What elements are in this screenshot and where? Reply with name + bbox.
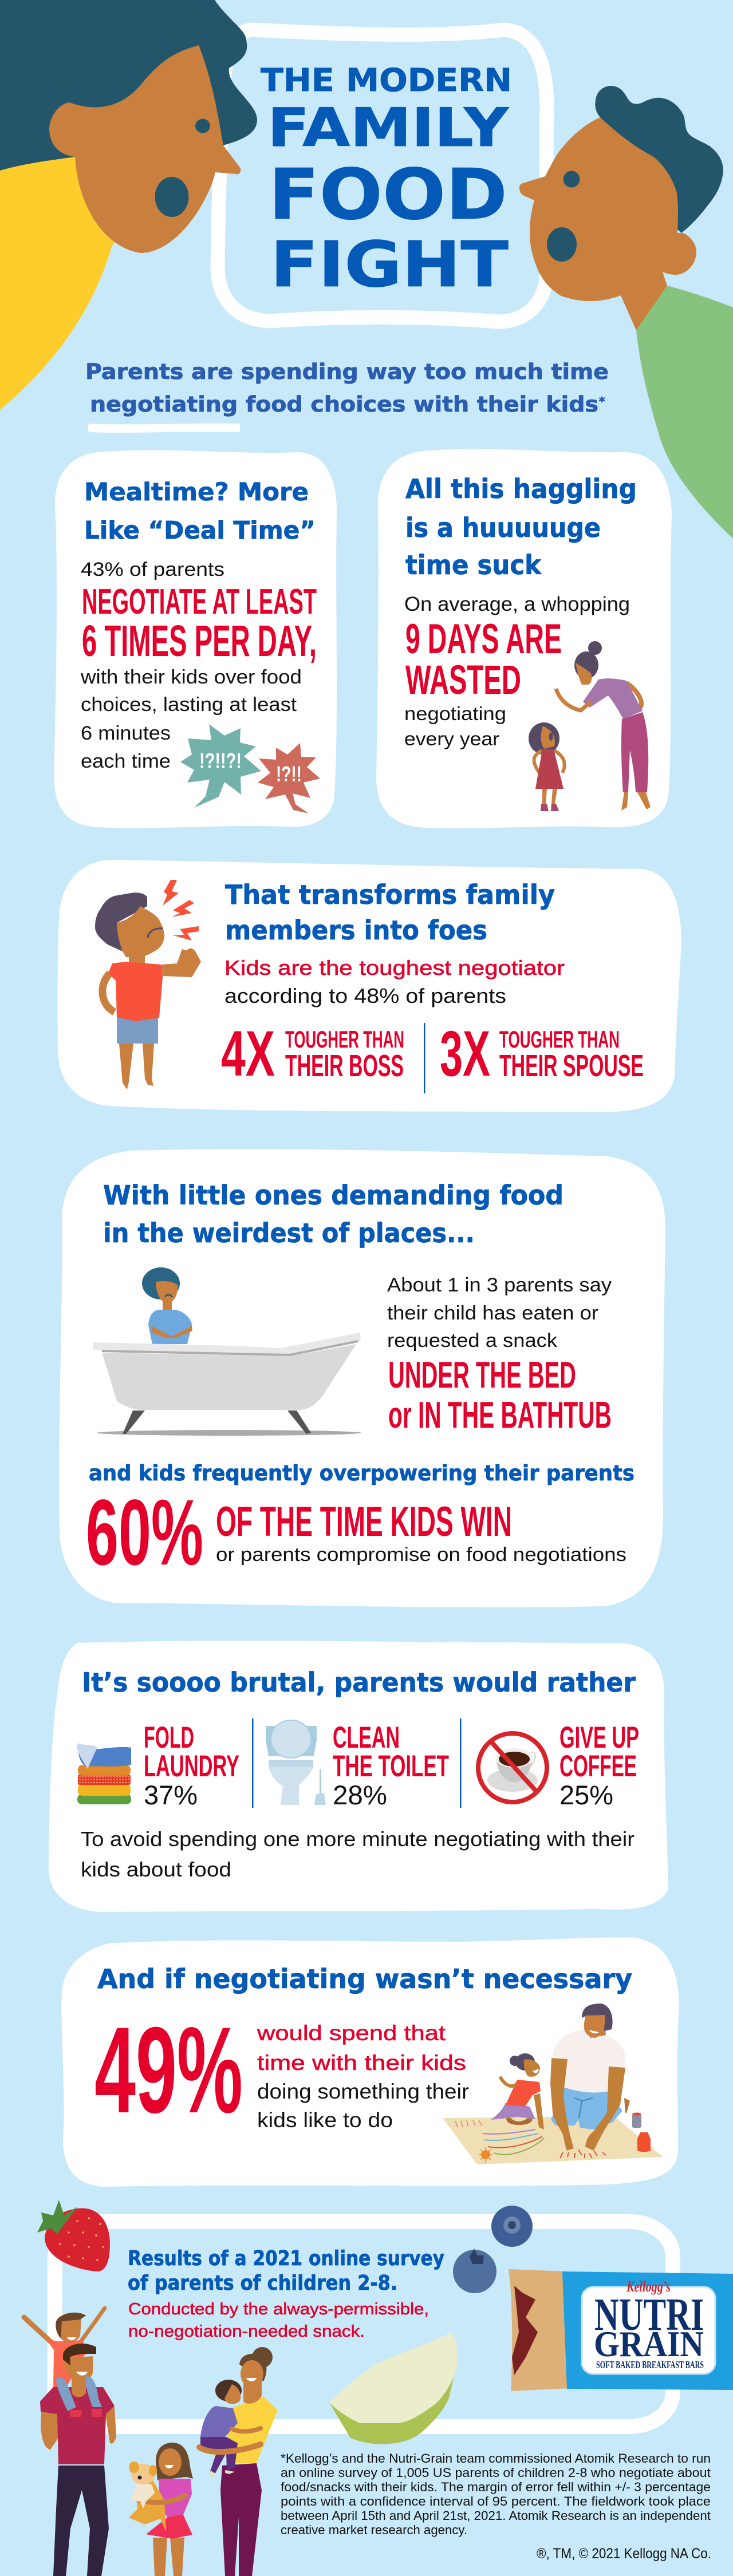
footnote xyxy=(281,2451,711,2537)
stat: under the bed or in the bathtub: UNDER THE BED xyxy=(388,1354,576,1396)
stat: 4X tougher than boss: TOUGHER THAN xyxy=(285,1026,404,1053)
subtitle: negotiating food choices with their kids xyxy=(90,392,598,417)
stat: 49%: 49% xyxy=(94,2002,243,2139)
illustration: boy refusing xyxy=(95,880,201,1089)
heading: family members into foes: That transforms family xyxy=(225,879,555,910)
heading: deal time xyxy=(84,478,316,545)
stat: negotiate at least 6 times per day xyxy=(82,582,317,666)
stat: 3X tougher than spouse: 3X xyxy=(440,1018,490,1089)
subtitle: * xyxy=(599,394,605,408)
icon: red speech burst: !?!! xyxy=(276,762,302,787)
panel: brutal choices xyxy=(49,1641,668,1912)
title: FOOD xyxy=(269,154,507,235)
text: negotiating every year xyxy=(404,703,506,749)
stat: fold laundry: LAUNDRY xyxy=(144,1749,239,1783)
image: strawberry xyxy=(37,2200,110,2271)
text: avoid negotiating: kids about food xyxy=(81,1858,231,1881)
stat: 4X tougher than boss: THEIR BOSS xyxy=(285,1049,404,1083)
heading: haggling: is a huuuuuge xyxy=(405,512,601,543)
text: on average: On average, a whopping xyxy=(404,593,630,615)
text: negotiating every year: every year xyxy=(404,728,499,749)
illustration: kid in bathtub xyxy=(93,1267,361,1436)
text: 43% of parents: 43% of parents xyxy=(81,559,224,580)
heading: deal time: Like “Deal Time” xyxy=(84,516,316,545)
text: 1 in 3 parents: their child has eaten or xyxy=(387,1302,598,1324)
stat: 9 days are wasted: WASTED xyxy=(405,658,521,703)
heading: haggling: time suck xyxy=(405,550,542,580)
survey frame xyxy=(55,2222,673,2427)
title xyxy=(261,62,512,301)
stat: 3X tougher than spouse: TOUGHER THAN xyxy=(499,1026,620,1053)
icon: teal speech burst xyxy=(180,724,261,808)
heading: haggling xyxy=(405,473,637,580)
copyright: ®, TM, © 2021 Kellogg NA Co. xyxy=(537,2546,711,2562)
footnote: *Kellogg’s and the Nutri-Grain team commissioned Atomik Research to run xyxy=(281,2451,711,2466)
panel: mealtime xyxy=(54,450,337,828)
stat: clean the toilet: 28% xyxy=(333,1780,387,1810)
stat: 4X tougher than boss: 4X xyxy=(221,1018,275,1089)
text: negotiation details: choices, lasting at least xyxy=(81,694,297,716)
text: spend time with kids: doing something their xyxy=(257,2080,469,2103)
footnote: between April 15th and April 21st, 2021. Atomik Research is an independent xyxy=(281,2508,711,2523)
stat: 60% of the time kids win: 60% xyxy=(86,1480,203,1585)
text: toughest negotiator xyxy=(224,956,565,1008)
heading: not necessary: And if negotiating wasn’t necessary xyxy=(97,1963,632,1994)
heading: weird places: in the weirdest of places... xyxy=(103,1218,475,1249)
text: negotiation details: with their kids over food xyxy=(80,666,302,688)
text: 1 in 3 parents: About 1 in 3 parents say xyxy=(387,1274,612,1296)
text: avoid negotiating xyxy=(81,1827,635,1881)
image: nutri-grain bar and package xyxy=(509,2269,733,2391)
subtitle: Parents are spending way too much time xyxy=(85,359,609,384)
title frame xyxy=(218,30,547,322)
figure: mother and toddler xyxy=(199,2347,278,2576)
heading: weird places: With little ones demanding food xyxy=(103,1180,563,1211)
heading: deal time: Mealtime? More xyxy=(84,478,309,507)
footnote: food/snacks with their kids. The margin of error fell within +/- 3 percentage xyxy=(281,2480,711,2494)
heading: haggling: All this haggling xyxy=(405,473,637,504)
text: spend time with kids: time with their kids xyxy=(257,2051,466,2075)
stat: clean the toilet: THE TOILET xyxy=(333,1749,449,1783)
figure: father and son xyxy=(24,2308,116,2576)
panel: time suck xyxy=(376,449,672,828)
image: blueberry top xyxy=(491,2206,533,2247)
text: conducted by: Conducted by the always-permissible, xyxy=(128,2300,429,2318)
title: FAMILY xyxy=(267,97,510,159)
stat: negotiate at least 6 times per day: 6 TIMES PER DAY, xyxy=(82,617,317,666)
image: apple slice xyxy=(329,2332,458,2444)
stat: 60% of the time kids win: OF THE TIME KIDS WIN xyxy=(216,1499,512,1545)
text: survey results xyxy=(128,2247,444,2295)
stat: negotiate at least 6 times per day: NEGOTIATE AT LEAST xyxy=(82,582,317,622)
illustration: mother scolding child xyxy=(529,641,651,811)
stat: give up coffee: GIVE UP xyxy=(559,1721,639,1755)
text: negotiation details xyxy=(80,666,302,772)
text: survey results: of parents of children 2-8. xyxy=(128,2271,397,2295)
icon: toilet xyxy=(266,1720,326,1805)
footnote: an online survey of 1,005 US parents of children 2-8 who negotiate about xyxy=(281,2466,711,2480)
footnote: points with a confidence interval of 95 percent. The fieldwork took place xyxy=(281,2494,711,2508)
icon: folded laundry xyxy=(77,1743,131,1804)
title: THE MODERN xyxy=(261,62,512,98)
stat: 4X tougher than boss xyxy=(221,1018,404,1089)
figure: girl with puppy xyxy=(129,2443,193,2576)
stat: clean the toilet xyxy=(333,1721,449,1810)
text: avoid negotiating: To avoid spending one more minute negotiating with their xyxy=(81,1827,635,1851)
stat: give up coffee: 25% xyxy=(559,1780,613,1810)
text: negotiating every year: negotiating xyxy=(404,703,506,724)
text: toughest negotiator: Kids are the toughest negotiator xyxy=(224,956,565,979)
panel: family foes xyxy=(57,860,681,1112)
panel: if negotiating was not necessary xyxy=(61,1937,679,2187)
stat: 9 days are wasted: 9 DAYS ARE xyxy=(405,616,562,662)
image: nutri-grain bar and package: Kellogg’s xyxy=(626,2278,671,2295)
stat: 3X tougher than spouse xyxy=(440,1018,644,1089)
text: conducted by: no-negotiation-needed snack. xyxy=(128,2322,365,2341)
icon: teal speech burst: !?!!?! xyxy=(199,749,242,773)
text: negotiation details: each time xyxy=(81,750,171,772)
text: 1 in 3 parents: requested a snack xyxy=(387,1330,558,1352)
heading: brutal: It’s soooo brutal, parents would rather xyxy=(82,1667,636,1698)
stat: fold laundry: 37% xyxy=(144,1780,198,1810)
text: 1 in 3 parents xyxy=(387,1274,612,1352)
image: blueberry lower xyxy=(453,2249,496,2293)
text: negotiation details: 6 minutes xyxy=(81,722,171,744)
heading: family members into foes: members into foes xyxy=(225,915,487,946)
panel: weird places xyxy=(59,1149,665,1607)
heading: weird places xyxy=(103,1180,563,1249)
subtitle xyxy=(85,359,609,417)
stat: clean the toilet: CLEAN xyxy=(333,1721,400,1755)
icon: red speech burst xyxy=(258,743,320,813)
stat: fold laundry: FOLD xyxy=(144,1721,194,1755)
subtitle underline xyxy=(88,424,241,433)
text: toughest negotiator: according to 48% of parents xyxy=(224,984,506,1008)
icon: no coffee xyxy=(478,1733,547,1802)
illustration: mother shouting xyxy=(0,0,257,410)
illustration: family xyxy=(24,2308,278,2576)
text: spend time with kids: kids like to do xyxy=(257,2108,393,2132)
heading: family members into foes xyxy=(225,879,555,946)
text: survey results: Results of a 2021 online survey xyxy=(128,2247,444,2270)
stat: 3X tougher than spouse: THEIR SPOUSE xyxy=(499,1049,644,1083)
stat: give up coffee: COFFEE xyxy=(559,1749,637,1783)
stat: 60% of the time kids win xyxy=(86,1480,626,1585)
stat: 9 days are wasted xyxy=(405,616,562,703)
image: nutri-grain bar and package: GRAIN xyxy=(594,2324,704,2364)
text: spend time with kids xyxy=(257,2021,469,2132)
stat: give up coffee xyxy=(559,1721,639,1810)
title: FIGHT xyxy=(270,228,509,301)
text: conducted by xyxy=(128,2300,429,2341)
stat: 60% of the time kids win: or parents compromise on food negotiations xyxy=(216,1544,626,1566)
illustration: son shouting xyxy=(519,86,733,539)
subheading: overpowering: and kids frequently overpowering their parents xyxy=(89,1461,635,1485)
illustration: parent and child chalk drawing xyxy=(443,2004,663,2164)
stat: under the bed or in the bathtub xyxy=(388,1354,612,1436)
stat: fold laundry xyxy=(144,1721,239,1810)
footnote: creative market research agency. xyxy=(281,2523,467,2537)
text: spend time with kids: would spend that xyxy=(257,2021,446,2045)
